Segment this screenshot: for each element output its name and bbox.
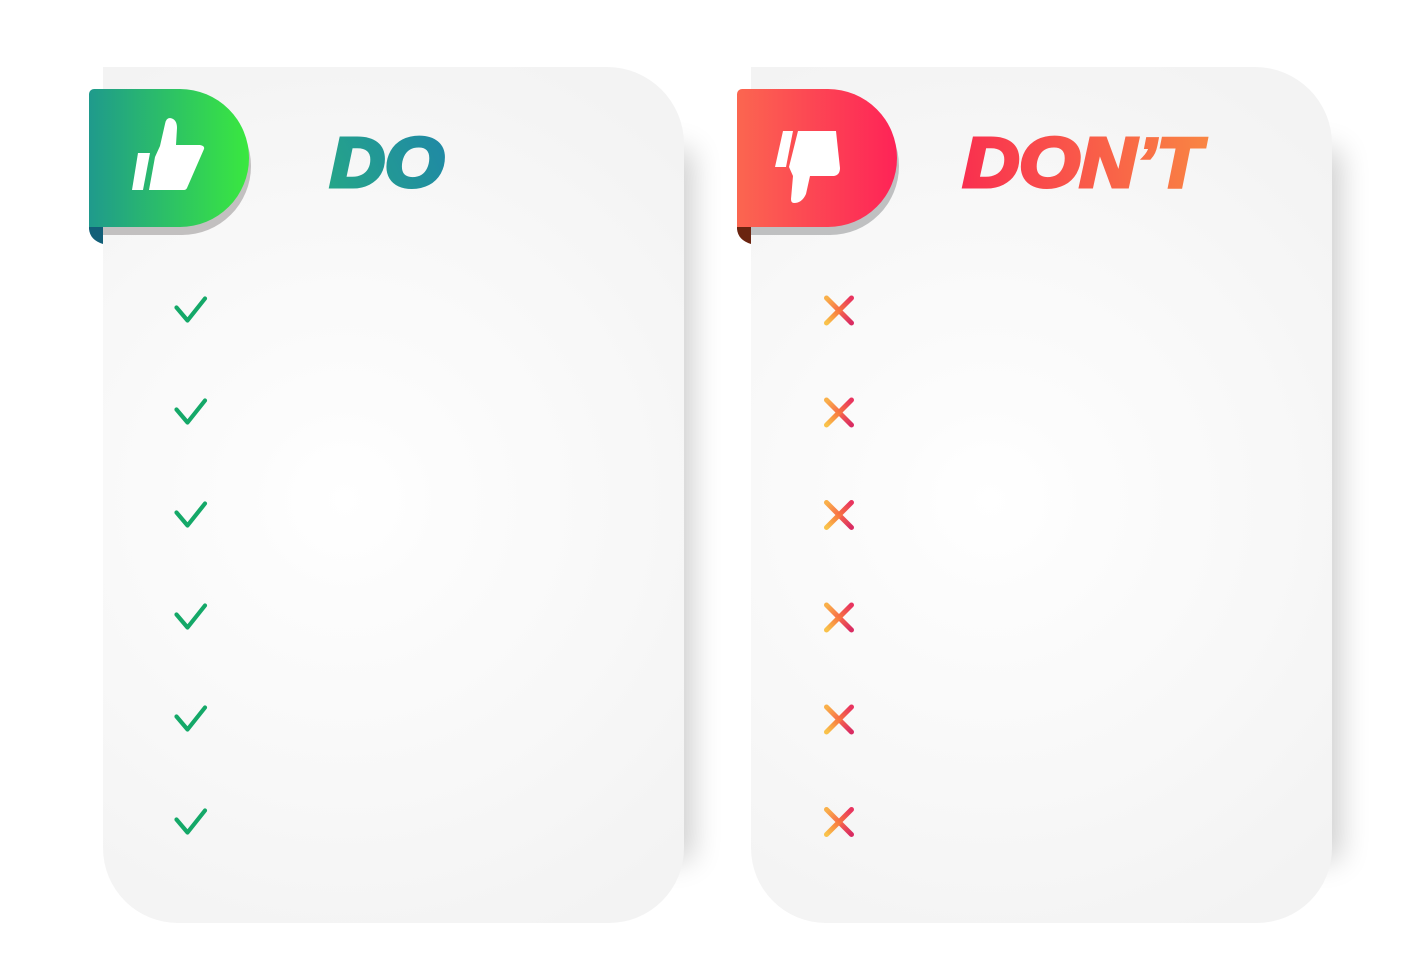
icon: cross mark 4 [826,605,852,630]
tag: do thumbs up badge [89,89,251,244]
icon: check mark 5 [176,708,205,730]
tag: don't thumbs down badge [737,89,899,244]
icon: cross mark 2 [826,400,852,425]
heading: DO: DO [330,124,444,202]
panel: do card [89,67,692,923]
icon: check mark 3 [176,504,205,526]
icon: check mark 2 [176,400,205,422]
icon: cross mark 6 [826,810,852,834]
panel: don't card [737,67,1340,923]
icon: cross mark 3 [826,502,852,528]
heading: DON'T: T [1157,124,1206,202]
icon: thumbs down [775,131,840,203]
icon: check mark 4 [176,606,205,628]
heading: DON'T: DON [963,124,1138,202]
icon: cross mark 5 [826,707,852,732]
icon: cross mark 1 [826,298,852,323]
heading: DON'T: ’ [1137,124,1158,202]
icon: check mark 6 [176,810,205,832]
icon: thumbs up [132,118,204,190]
heading: DON'T [963,124,1206,202]
icon: check mark 1 [176,298,205,320]
